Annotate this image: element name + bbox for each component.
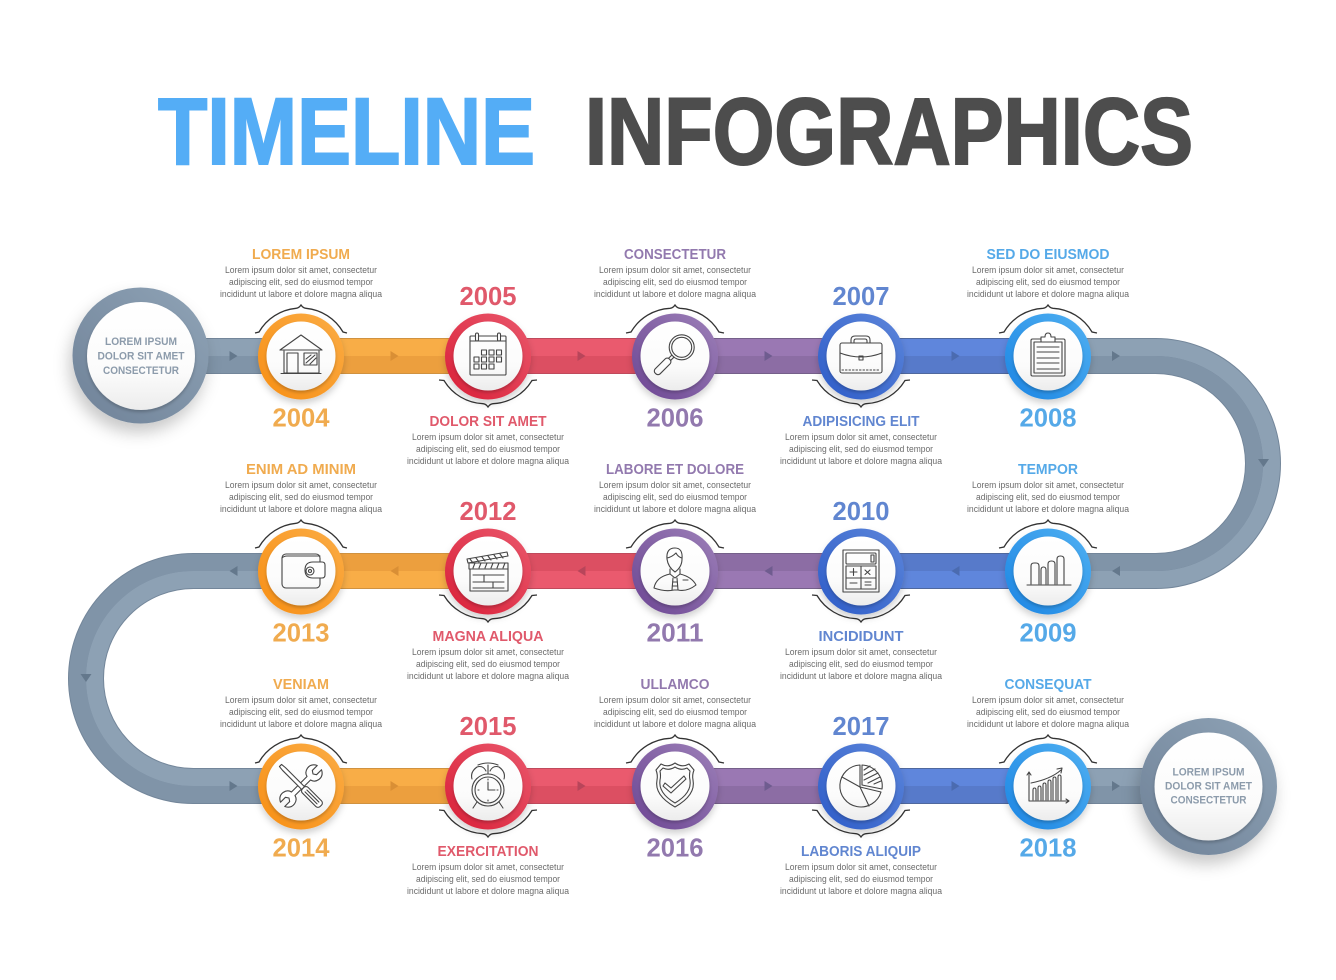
description: [967, 480, 1129, 514]
description: adipiscing elit, sed do eiusmod tempor: [416, 874, 560, 884]
disc: [826, 752, 896, 820]
start circle label: LOREM IPSUM: [105, 336, 177, 348]
description: incididunt ut labore et dolore magna aliqua: [407, 671, 569, 681]
description: incididunt ut labore et dolore magna aliqua: [220, 504, 382, 514]
heading: INCIDIDUNT: [819, 629, 904, 645]
description: adipiscing elit, sed do eiusmod tempor: [789, 659, 933, 669]
heading: LOREM IPSUM: [252, 247, 350, 263]
disc: [454, 536, 522, 606]
heading: CONSEQUAT: [1004, 677, 1092, 693]
description: incididunt ut labore et dolore magna aliqua: [780, 886, 942, 896]
start circle: [72, 288, 208, 424]
description: adipiscing elit, sed do eiusmod tempor: [976, 277, 1120, 287]
bracket: [626, 520, 724, 548]
grey road: right curve: [1048, 348, 1272, 580]
description: Lorem ipsum dolor sit amet, consectetur: [412, 432, 564, 442]
heading: VENIAM: [273, 677, 329, 693]
bracket: [255, 735, 347, 763]
ring: [632, 744, 718, 830]
grey road: left curve: [78, 562, 301, 794]
icon: clapperboard: [467, 552, 508, 591]
ring: [818, 744, 904, 830]
description: incididunt ut labore et dolore magna aliqua: [220, 719, 382, 729]
arrow: right curve pointing down: [1258, 459, 1269, 467]
description: [594, 695, 756, 729]
disc: [826, 322, 896, 390]
description: [220, 695, 382, 729]
start circle label: [98, 336, 185, 377]
description: Lorem ipsum dolor sit amet, consectetur: [972, 695, 1124, 705]
milestone 2015: [407, 711, 569, 896]
year: 2004: [272, 402, 330, 432]
year: 2010: [832, 496, 890, 526]
icon: house: [280, 335, 322, 374]
milestone 2010: [780, 496, 942, 681]
description: adipiscing elit, sed do eiusmod tempor: [416, 659, 560, 669]
disc: [1014, 536, 1082, 606]
heading: ULLAMCO: [640, 677, 710, 693]
heading: LABORIS ALIQUIP: [801, 844, 921, 860]
milestone 2016: [594, 677, 756, 862]
bracket: [439, 810, 537, 837]
heading: DOLOR SIT AMET: [430, 414, 547, 430]
disc: [826, 536, 896, 606]
ring: [445, 314, 531, 400]
icon: wrench and screwdriver: [277, 762, 325, 810]
milestone 2005: [407, 281, 569, 466]
icon: pie chart: [840, 765, 882, 807]
disc: [1014, 752, 1082, 820]
grey road: start connector: [140, 338, 301, 374]
year: 2013: [272, 618, 330, 648]
end circle label: CONSECTETUR: [1170, 794, 1247, 806]
bracket: [255, 520, 347, 548]
description: [780, 647, 942, 681]
description: Lorem ipsum dolor sit amet, consectetur: [785, 647, 937, 657]
bracket: [439, 380, 537, 407]
heading: CONSECTETUR: [624, 247, 726, 263]
description: [407, 647, 569, 681]
icon: growth chart: [1027, 768, 1069, 803]
description: [220, 265, 382, 299]
icon: wallet: [282, 554, 325, 588]
icon: bar chart: [1027, 556, 1071, 585]
description: adipiscing elit, sed do eiusmod tempor: [603, 492, 747, 502]
milestone 2013: [220, 462, 382, 648]
icon: alarm clock: [472, 763, 504, 808]
ring: [632, 528, 718, 614]
description: adipiscing elit, sed do eiusmod tempor: [603, 277, 747, 287]
arrows: row 1 pointing right: [230, 351, 1120, 361]
milestone 2008: [967, 247, 1129, 432]
description: Lorem ipsum dolor sit amet, consectetur: [599, 265, 751, 275]
description: Lorem ipsum dolor sit amet, consectetur: [785, 432, 937, 442]
description: Lorem ipsum dolor sit amet, consectetur: [599, 480, 751, 490]
heading: ADIPISICING ELIT: [802, 414, 920, 430]
end circle label: [1165, 766, 1252, 806]
disc: [640, 322, 710, 390]
ring: [632, 314, 718, 400]
milestone 2004: [220, 247, 382, 432]
disc: [454, 322, 522, 390]
ring: [1005, 314, 1091, 400]
description: adipiscing elit, sed do eiusmod tempor: [229, 707, 373, 717]
description: Lorem ipsum dolor sit amet, consectetur: [225, 695, 377, 705]
ring: [258, 314, 344, 400]
description: incididunt ut labore et dolore magna aliqua: [967, 504, 1129, 514]
description: [407, 432, 569, 466]
description: incididunt ut labore et dolore magna aliqua: [407, 456, 569, 466]
description: Lorem ipsum dolor sit amet, consectetur: [412, 862, 564, 872]
title: [158, 79, 1193, 185]
bracket: [812, 595, 910, 622]
description: incididunt ut labore et dolore magna aliqua: [594, 719, 756, 729]
description: adipiscing elit, sed do eiusmod tempor: [976, 707, 1120, 717]
ring: [1005, 744, 1091, 830]
description: adipiscing elit, sed do eiusmod tempor: [229, 492, 373, 502]
milestone 2018: [967, 677, 1129, 862]
description: Lorem ipsum dolor sit amet, consectetur: [972, 480, 1124, 490]
disc: [454, 752, 522, 820]
bracket: [439, 595, 537, 622]
ring: [445, 528, 531, 614]
bracket: [999, 735, 1097, 763]
road row 2 coloured segments: [301, 553, 1048, 589]
heading: ENIM AD MINIM: [246, 462, 356, 478]
end circle: [1140, 718, 1277, 855]
bracket: [812, 810, 910, 837]
milestone 2017: [780, 711, 942, 896]
description: adipiscing elit, sed do eiusmod tempor: [229, 277, 373, 287]
year: 2007: [832, 281, 890, 311]
year: 2008: [1020, 402, 1076, 432]
year: 2006: [646, 402, 704, 432]
description: incididunt ut labore et dolore magna aliqua: [407, 886, 569, 896]
ring: [258, 528, 344, 614]
disc: [640, 752, 710, 820]
start circle label: DOLOR SIT AMET: [98, 350, 185, 362]
bracket: [812, 380, 910, 407]
start circle label: CONSECTETUR: [103, 365, 179, 377]
description: adipiscing elit, sed do eiusmod tempor: [789, 444, 933, 454]
description: [594, 265, 756, 299]
icon: briefcase: [840, 336, 882, 373]
description: incididunt ut labore et dolore magna aliqua: [594, 504, 756, 514]
bracket: [626, 735, 724, 763]
description: [594, 480, 756, 514]
year: 2005: [460, 281, 516, 311]
heading: MAGNA ALIQUA: [432, 629, 544, 645]
description: Lorem ipsum dolor sit amet, consectetur: [412, 647, 564, 657]
description: incididunt ut labore et dolore magna aliqua: [967, 719, 1129, 729]
description: Lorem ipsum dolor sit amet, consectetur: [599, 695, 751, 705]
description: incididunt ut labore et dolore magna aliqua: [594, 289, 756, 299]
icon: calendar: [470, 333, 506, 375]
bracket: [999, 520, 1097, 548]
year: 2018: [1020, 832, 1076, 862]
end circle label: LOREM IPSUM: [1172, 766, 1244, 778]
disc: [266, 322, 336, 390]
bracket: [999, 305, 1097, 333]
milestone 2007: [780, 281, 942, 466]
milestone 2009: [967, 462, 1129, 648]
milestone 2012: [407, 496, 569, 681]
heading: EXERCITATION: [438, 844, 538, 860]
description: incididunt ut labore et dolore magna aliqua: [780, 671, 942, 681]
year: 2012: [460, 496, 516, 526]
description: incididunt ut labore et dolore magna aliqua: [780, 456, 942, 466]
description: [407, 862, 569, 896]
year: 2015: [460, 711, 516, 741]
arrows: row 3 pointing right: [230, 781, 1120, 791]
description: [967, 695, 1129, 729]
road row 1 coloured segments: [301, 338, 1048, 374]
title word: infographics: INFOGRAPHICS: [585, 79, 1193, 185]
ring: [445, 744, 531, 830]
ring: [818, 528, 904, 614]
heading: SED DO EIUSMOD: [986, 247, 1110, 263]
icon: calculator: [843, 550, 879, 592]
ring: [818, 314, 904, 400]
description: adipiscing elit, sed do eiusmod tempor: [603, 707, 747, 717]
disc: [640, 536, 710, 606]
description: Lorem ipsum dolor sit amet, consectetur: [225, 480, 377, 490]
description: Lorem ipsum dolor sit amet, consectetur: [972, 265, 1124, 275]
year: 2011: [646, 618, 704, 648]
heading: TEMPOR: [1018, 462, 1079, 478]
year: 2014: [272, 832, 330, 862]
year: 2017: [832, 711, 890, 741]
grey road: end connector: [1048, 768, 1208, 804]
disc: [1014, 322, 1082, 390]
description: incididunt ut labore et dolore magna aliqua: [967, 289, 1129, 299]
disc: [266, 536, 336, 606]
description: [780, 432, 942, 466]
description: adipiscing elit, sed do eiusmod tempor: [416, 444, 560, 454]
icon: magnifier: [647, 330, 699, 382]
road row 3 coloured segments: [301, 768, 1048, 804]
description: Lorem ipsum dolor sit amet, consectetur: [225, 265, 377, 275]
heading: LABORE ET DOLORE: [606, 462, 744, 478]
milestone 2014: [220, 677, 382, 862]
description: adipiscing elit, sed do eiusmod tempor: [789, 874, 933, 884]
year: 2016: [646, 832, 704, 862]
disc: [266, 752, 336, 820]
end circle label: DOLOR SIT AMET: [1165, 780, 1252, 792]
icon: businessman: [654, 548, 696, 591]
ring: [258, 744, 344, 830]
description: [780, 862, 942, 896]
arrows: row 2 pointing left: [230, 566, 1120, 576]
description: adipiscing elit, sed do eiusmod tempor: [976, 492, 1120, 502]
description: [220, 480, 382, 514]
milestone 2006: [594, 247, 756, 432]
description: Lorem ipsum dolor sit amet, consectetur: [785, 862, 937, 872]
description: [967, 265, 1129, 299]
milestone 2011: [594, 462, 756, 648]
arrow: left curve pointing down: [80, 674, 92, 682]
icon: shield with check: [656, 763, 694, 807]
icon: clipboard: [1031, 333, 1065, 376]
ring: [1005, 528, 1091, 614]
description: incididunt ut labore et dolore magna aliqua: [220, 289, 382, 299]
bracket: [626, 305, 724, 333]
year: 2009: [1020, 618, 1076, 648]
title word: timeline: TIMELINE: [158, 79, 535, 185]
bracket: [255, 305, 347, 333]
